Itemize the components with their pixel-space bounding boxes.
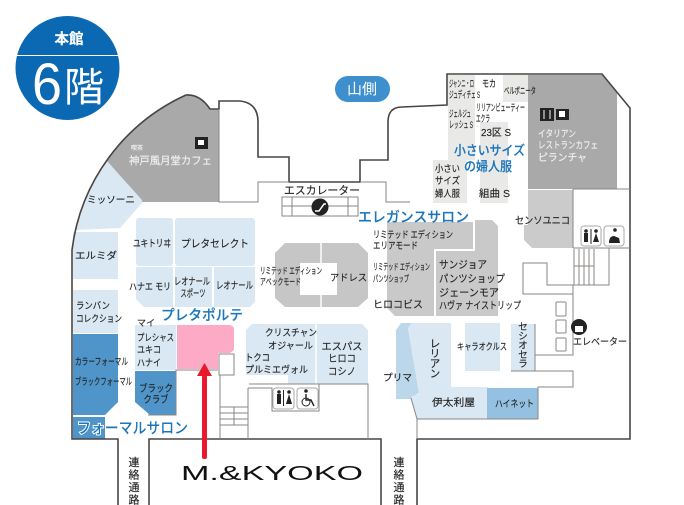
panel: south-east shops: 伊太利屋 <box>432 396 475 409</box>
panel: Elegance salon gray shops: ヒロコビス <box>373 299 423 311</box>
panel: small-size womenswear shops: 組曲 S <box>479 187 510 200</box>
panel: formal salon shops <box>73 334 176 439</box>
panel: Christian Aujard and Espace shops: トクコ <box>245 353 270 364</box>
panel: Elegance salon gray shops: ジェーンモア <box>439 287 499 299</box>
icon: restrooms east <box>581 226 624 246</box>
panel: south-east shops: ハイネット <box>495 399 534 410</box>
panel: small-size womenswear shops: ジャンニ・ロ <box>449 79 474 90</box>
panel: Sensounico: センソユニコ <box>515 215 570 227</box>
mountain side badge: 山側 <box>347 81 377 98</box>
icon: restrooms west <box>273 388 318 409</box>
stairs west <box>220 407 248 425</box>
panel: south-east shops: ア <box>430 358 440 370</box>
panel: pret-a-porter shops: ハナエ モリ <box>129 282 171 293</box>
stairs east <box>574 249 594 285</box>
panel: west shops: ランバン <box>76 301 110 312</box>
building walls <box>72 74 630 505</box>
panel: formal salon shops: ブラック <box>139 382 173 395</box>
panel: pret-a-porter shops: ユキコ <box>137 345 161 356</box>
panel: Christian Aujard and Espace shops: オジャール <box>268 341 313 352</box>
panel: south-east shops: ン <box>430 368 440 380</box>
heading: small-size womenswear: の婦人服 <box>464 159 512 174</box>
escalator <box>282 184 360 216</box>
panel: Christian Aujard and Espace shops: ヒロコ <box>328 353 356 365</box>
panel: pret-a-porter shops: レオナール <box>174 276 210 288</box>
panel: south-east shops: シ <box>518 331 528 342</box>
panel: small-size womenswear shops: 小さい <box>435 164 460 175</box>
panel: Elegance salon gray shops: パンツショップ <box>439 273 505 285</box>
label: connecting passage west: 連 <box>128 457 140 469</box>
panel: Christian Aujard and Espace shops: クリスチャン <box>265 328 317 339</box>
panel: Christian Aujard and Espace shops: コシノ <box>328 367 356 378</box>
panel: Christian Aujard and Espace shops: プルミエヴォル <box>245 364 308 376</box>
label: connecting passage east: 連 <box>394 457 404 469</box>
panel: Elegance salon gray shops: ハヴァ ナイストリップ <box>439 299 521 312</box>
panel: pret-a-porter shops: ハナイ <box>137 358 161 369</box>
panel: Elegance salon gray shops: リミテッド エディション <box>373 229 453 241</box>
panel: Sensounico <box>515 190 573 248</box>
icon and label: elevator: エレベーター <box>573 337 627 348</box>
panel: pret-a-porter shops: マイ <box>137 318 155 328</box>
panel: Italian restaurant cafe Piranja: レストランカフェ <box>538 140 598 152</box>
panel: pret-a-porter shops: レオナール <box>216 280 253 292</box>
label: connecting passage west: 通 <box>128 481 140 494</box>
panel: south-east shops: リ <box>430 348 440 360</box>
panel: cafe Fugetsudo <box>107 95 219 202</box>
panel: small-size womenswear shops: サイズ <box>435 175 460 187</box>
floor badge: main building 6F: 6 <box>32 52 62 117</box>
panel: south-east shops: セ <box>518 322 528 333</box>
label: connecting passage west: 絡 <box>128 468 140 482</box>
panel: Elegance salon gray shops <box>373 220 521 316</box>
panel: south-east shops: プリマ <box>383 373 412 384</box>
icon and label: elevator <box>556 302 627 351</box>
panel: center gray shops: アベックモード <box>260 277 301 287</box>
panel: Elegance salon gray shops: サンジョア <box>439 259 487 271</box>
panel: Christian Aujard and Espace shops <box>245 324 368 384</box>
arrow: pointing to shop <box>197 363 212 459</box>
label: connecting passage east: 通 <box>394 481 404 494</box>
panel: small-size womenswear shops: ベルボニータ <box>504 86 536 96</box>
panel: cafe Fugetsudo: 神戸風月堂カフェ <box>129 154 212 167</box>
floor badge: main building 6F: 本館 <box>54 31 84 48</box>
panel: south-east shops: オ <box>518 341 528 352</box>
panel: Italian restaurant cafe Piranja: イタリアン <box>538 129 576 140</box>
label: M.&KYOKO: M.&KYOKO <box>181 463 363 485</box>
mountain side badge <box>335 76 390 102</box>
panel: small-size womenswear shops: ジェルジュ <box>449 109 471 120</box>
panel: west shops <box>73 161 142 333</box>
floor badge: main building 6F: 階 <box>64 66 104 110</box>
panel: south-east shops: キャラオクルス <box>457 342 507 353</box>
panel: south-east shops <box>383 322 538 419</box>
panel: pret-a-porter shops <box>129 218 255 370</box>
panel: west shops: エルミダ <box>75 250 118 262</box>
heading: small-size womenswear: 小さいサイズ <box>454 143 525 158</box>
panel: center gray shops: リミテッド エディション <box>260 265 322 276</box>
panel: formal salon shops: クラブ <box>144 393 168 406</box>
label: connecting passage east: 絡 <box>394 468 404 482</box>
heading: formal salon: フォーマルサロン <box>77 420 188 437</box>
panel: Elegance salon gray shops: パンツショップ <box>373 274 409 284</box>
panel: cafe Fugetsudo: 喫茶 <box>131 144 143 152</box>
heading: Elegance salon: エレガンスサロン <box>358 209 469 225</box>
panel: small-size womenswear shops: レッシュ S <box>449 120 473 131</box>
panel: center gray shops <box>260 243 368 307</box>
panel: small-size womenswear shops <box>433 75 536 203</box>
panel: Elegance salon gray shops: エリアモード <box>373 241 418 252</box>
panel: small-size womenswear shops: 23区 S <box>481 128 511 139</box>
panel: pret-a-porter shops: スポーツ <box>180 288 206 300</box>
panel: Elegance salon gray shops: リミテッド エディション <box>373 261 430 272</box>
panel: pret-a-porter shops: プレシャス <box>137 333 174 344</box>
panel: south-east shops: セ <box>518 350 528 361</box>
panel: Italian restaurant cafe Piranja: ピランチャ <box>538 152 587 164</box>
panel: formal salon shops: ブラックフォーマル <box>75 376 132 388</box>
floor badge: main building 6F <box>15 16 120 120</box>
panel: M.&KYOKO highlighted shop <box>177 325 234 369</box>
panel: formal salon shops: カラーフォーマル <box>75 357 128 368</box>
panel: west shops: コレクション <box>76 314 122 325</box>
panel: center gray shops: アドレス <box>330 273 367 284</box>
panel: south-east shops: ラ <box>518 359 528 370</box>
panel: pret-a-porter shops: ユキトリヰ <box>133 238 171 250</box>
panel: south-east shops: レ <box>430 338 440 350</box>
panel: Italian restaurant cafe Piranja <box>528 75 617 189</box>
heading: pret-a-porter: プレタポルテ <box>161 307 243 323</box>
escalator: エスカレーター <box>284 184 360 197</box>
panel: small-size womenswear shops: モカ <box>482 79 496 90</box>
panel: Christian Aujard and Espace shops: エスパス <box>322 341 362 353</box>
panel: pret-a-porter shops: プレタセレクト <box>181 238 249 250</box>
panel: small-size womenswear shops: ジュディチェ S <box>449 89 480 101</box>
panel: small-size womenswear shops: エクラ <box>476 114 490 125</box>
panel: west shops: ミッソーニ <box>87 195 135 206</box>
panel: small-size womenswear shops: リリアンビューティー <box>476 103 525 114</box>
heading: small-size womenswear <box>454 143 525 174</box>
panel: small-size womenswear shops: 婦人服 <box>435 188 460 200</box>
